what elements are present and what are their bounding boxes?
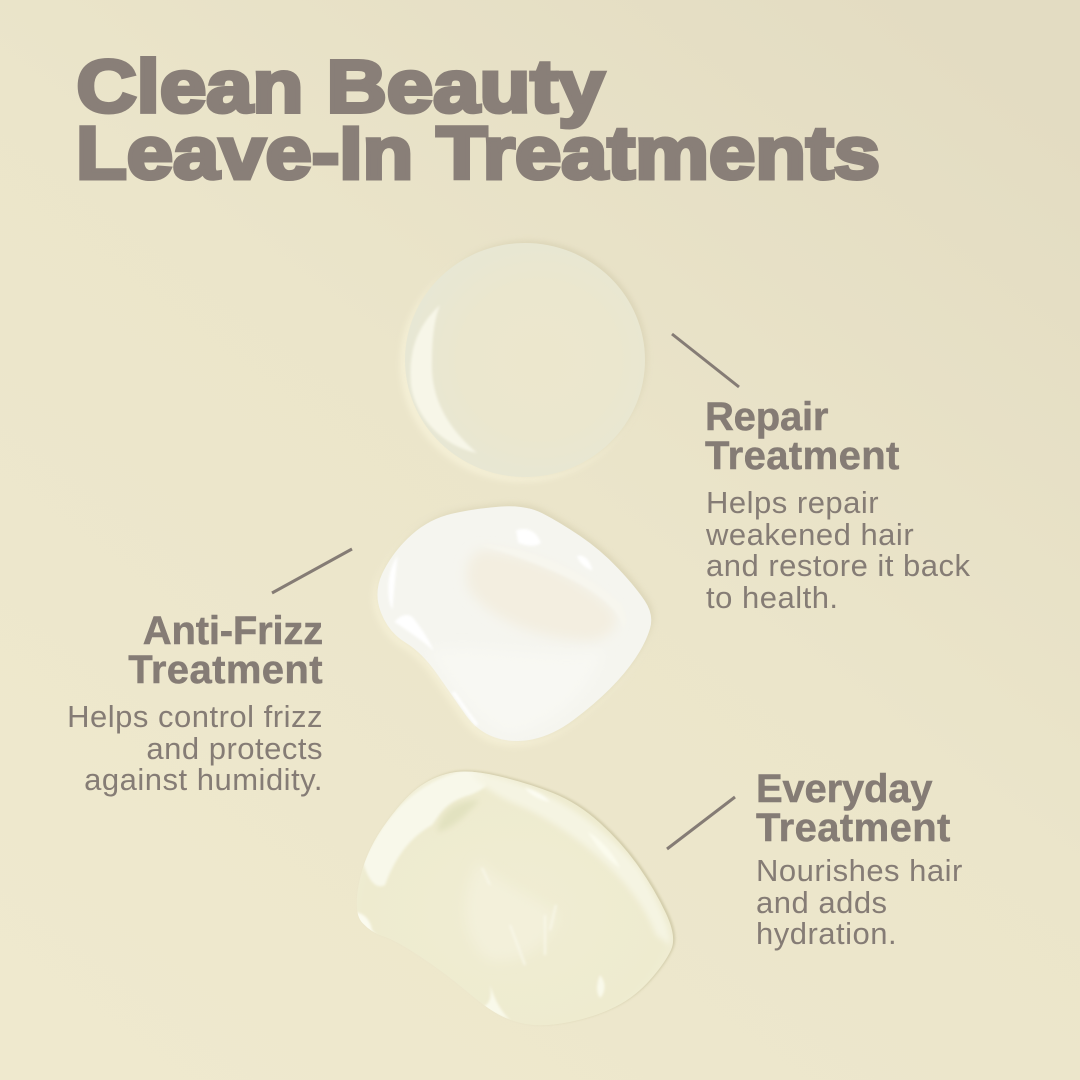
text: anti-frizz description: against humidity. — [84, 762, 323, 797]
text: anti-frizz description: and protects — [146, 730, 323, 766]
text: repair description — [706, 485, 971, 614]
text: everyday description: and adds — [756, 884, 888, 920]
text: repair description: Helps repair — [706, 485, 879, 520]
swatch: everyday treatment — [353, 770, 675, 1025]
title: Leave-In Treatments — [76, 112, 880, 195]
text: repair description: to health. — [706, 580, 839, 614]
text: everyday description — [756, 853, 963, 951]
text: repair description: weakened hair — [706, 516, 914, 552]
label: repair treatment — [705, 395, 971, 614]
heading: everyday: Treatment — [756, 806, 951, 850]
title: Clean Beauty — [76, 45, 604, 128]
swatch: anti-frizz treatment — [375, 504, 653, 744]
heading: repair: Treatment — [705, 434, 900, 478]
title — [76, 45, 880, 195]
heading: anti-frizz — [128, 609, 323, 692]
heading: anti-frizz: Anti-Frizz — [143, 609, 323, 653]
heading: anti-frizz: Treatment — [128, 648, 323, 692]
text: repair description: and restore it back — [706, 548, 971, 583]
heading: repair — [705, 395, 900, 478]
arrow: repair leader line — [671, 333, 740, 388]
text: everyday description: hydration. — [756, 916, 897, 951]
arrow: anti-frizz leader line — [271, 548, 353, 594]
label: anti-frizz treatment — [67, 609, 323, 797]
arrow: everyday leader line — [666, 796, 736, 850]
background and product swatches — [0, 241, 676, 1080]
label: everyday treatment — [756, 767, 963, 951]
text: anti-frizz description — [67, 699, 323, 797]
heading: repair: Repair — [705, 395, 828, 439]
text: anti-frizz description: Helps control frizz — [67, 699, 323, 734]
heading: everyday — [756, 767, 951, 850]
text: everyday description: Nourishes hair — [756, 853, 963, 888]
heading: everyday: Everyday — [756, 767, 932, 811]
swatch: repair treatment — [400, 241, 647, 482]
